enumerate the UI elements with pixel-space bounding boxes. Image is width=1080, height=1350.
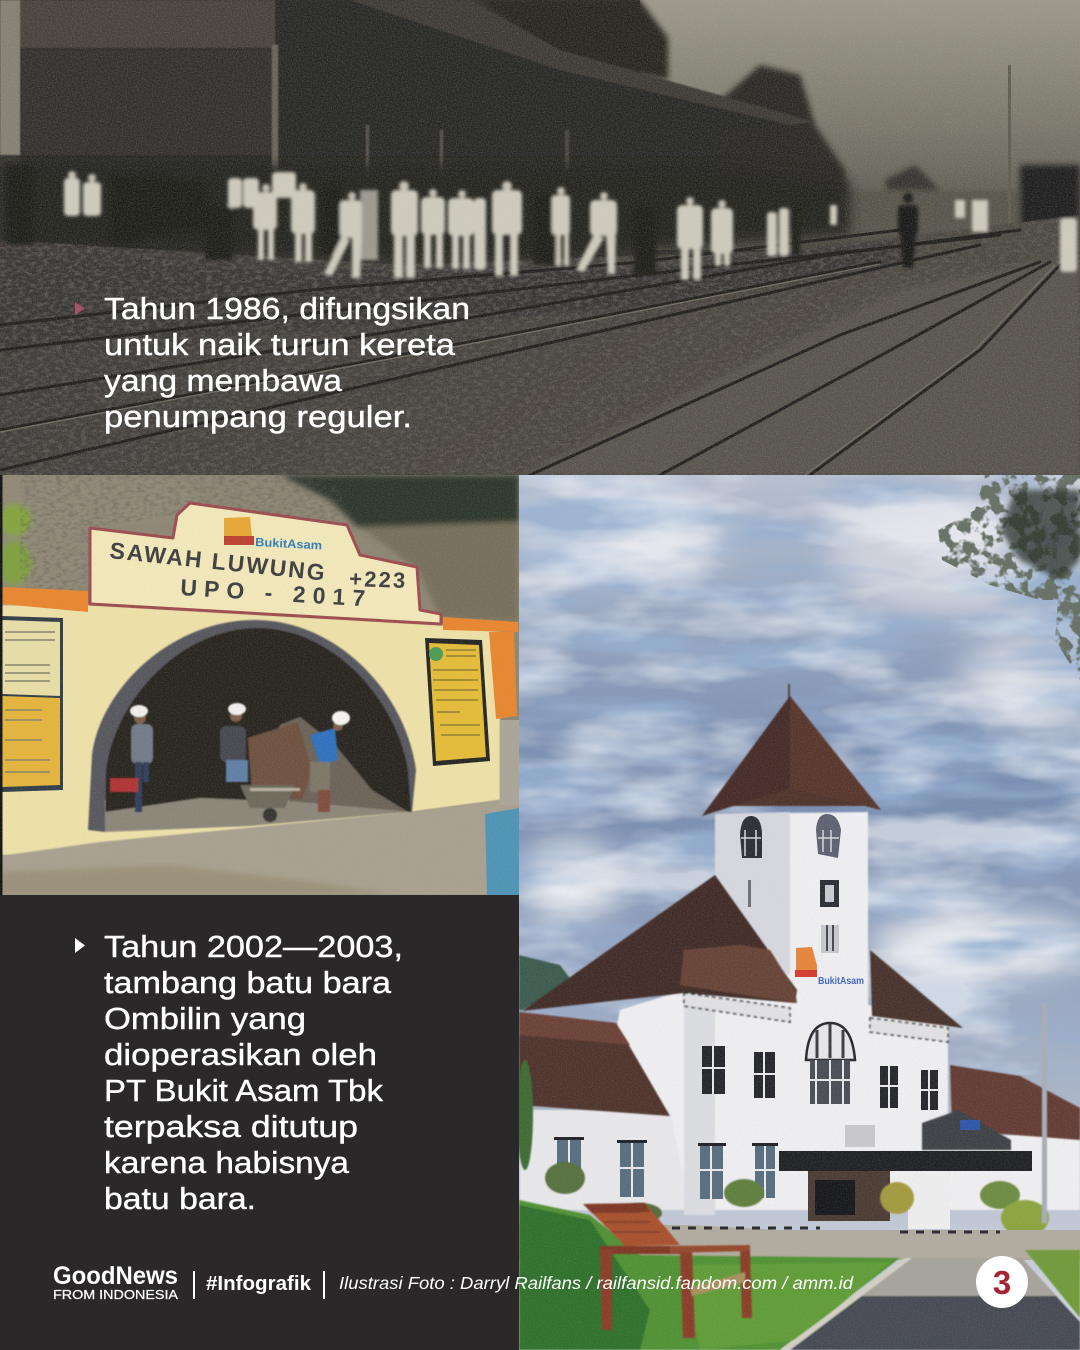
text: 2002-2003 mine closure note: PT Bukit Asam Tbk — [104, 1073, 384, 1108]
tunnel sign — [90, 503, 441, 624]
facade — [0, 605, 500, 860]
dark band behind crowd — [0, 165, 850, 260]
tree foliage top right — [938, 475, 1080, 680]
photo: historic railway station — [0, 0, 1080, 475]
panel: dark text background — [0, 895, 519, 1350]
footer: GoodNews logo: GoodNews — [53, 1262, 178, 1290]
photo: Bukit Asam colonial building — [510, 475, 1080, 1350]
page number badge — [976, 1256, 1028, 1308]
main building walls — [520, 812, 1080, 1215]
text: 2002-2003 mine closure note: dioperasikan oleh — [104, 1037, 377, 1072]
text: 1986 railway note — [104, 291, 470, 434]
text: 1986 railway note: Tahun 1986, difungsikan — [104, 291, 470, 326]
main left roof — [522, 875, 797, 1022]
tunnel sign: SAWAH LUWUNG — [108, 537, 326, 586]
footer: GoodNews logo: FROM INDONESIA — [53, 1287, 178, 1302]
blue barrel — [485, 808, 519, 895]
text: 2002-2003 mine closure note: terpaksa ditutup — [104, 1109, 358, 1144]
entrance canopy and gable — [779, 1110, 1032, 1229]
right wing roof — [950, 1065, 1080, 1140]
tunnel sign: +223 — [349, 566, 406, 593]
page number badge: 3 — [993, 1264, 1011, 1301]
text: 2002-2003 mine closure note — [104, 929, 403, 1216]
text: 1986 railway note: penumpang reguler. — [104, 399, 412, 434]
footer: GoodNews logo — [53, 1262, 178, 1302]
text: 1986 railway note: untuk naik turun kereta — [104, 327, 456, 362]
tunnel sign: BukitAsam — [255, 535, 322, 553]
notice board left — [2, 616, 63, 792]
text: 2002-2003 mine closure note: batu bara. — [104, 1181, 256, 1216]
crowd of people — [6, 165, 1077, 280]
red wooden bench — [583, 1203, 752, 1338]
orange trim — [2, 587, 518, 719]
road — [519, 1225, 1080, 1260]
Bukit Asam logo — [795, 947, 864, 987]
tunnel arch — [88, 620, 416, 832]
tower roof — [702, 684, 881, 816]
shrubs and palms — [517, 1003, 1049, 1236]
track bed — [0, 215, 1080, 475]
tunnel sign: UPO - 2017 — [180, 574, 366, 611]
clouds — [510, 475, 1080, 1075]
notice board right — [425, 638, 490, 766]
left wing roof — [519, 1012, 670, 1116]
lower windows — [554, 1137, 778, 1199]
footer: hashtag: #Infografik — [206, 1273, 312, 1295]
lawn — [519, 1200, 1080, 1350]
photo: Sawah Luwung mine tunnel — [0, 475, 519, 895]
Bukit Asam logo: BukitAsam — [818, 976, 864, 987]
main right roof — [870, 950, 963, 1042]
text: 2002-2003 mine closure note: Tahun 2002—2003, — [104, 929, 403, 964]
paved path — [780, 1258, 1080, 1350]
rails — [0, 230, 1060, 475]
text: 2002-2003 mine closure note: karena habisnya — [104, 1145, 350, 1180]
workers — [110, 703, 350, 822]
station canopy — [0, 0, 810, 172]
tower windows and ornaments — [740, 814, 841, 953]
bullet arrow: mine closure note — [75, 938, 85, 953]
text: 2002-2003 mine closure note: Ombilin yang — [104, 1001, 306, 1036]
text: 1986 railway note: yang membawa — [104, 363, 343, 398]
footer: photo credit: Ilustrasi Foto : Darryl Railfans / railfansid.fandom.com / amm.id — [339, 1273, 854, 1293]
arched centre window — [806, 1023, 855, 1104]
main building windows — [702, 1046, 938, 1110]
bullet arrow: railway note — [75, 302, 85, 315]
text: 2002-2003 mine closure note: tambang batu bara — [104, 965, 392, 1000]
